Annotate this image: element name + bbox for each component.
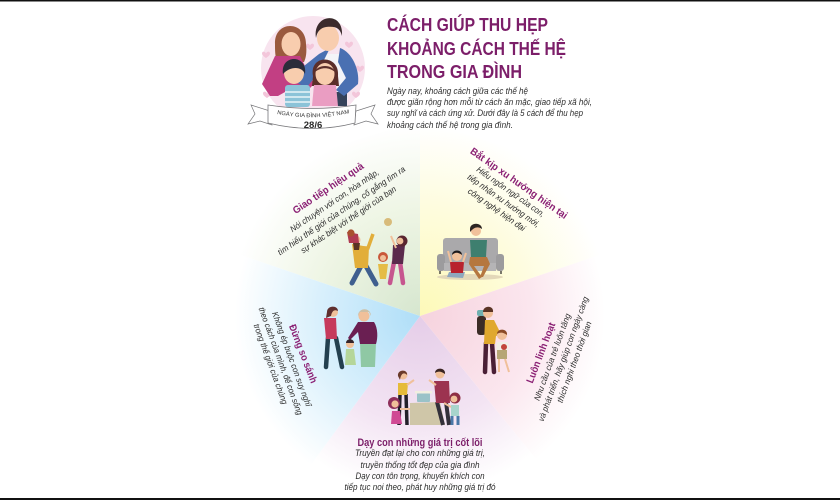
illustration: family playing ball xyxy=(347,218,408,284)
banner tails xyxy=(248,105,272,125)
text: Đừng so sánh: Đừng so sánh xyxy=(286,323,319,385)
banner label: NGÀY GIA ĐÌNH VIỆT NAM xyxy=(278,110,349,118)
boy xyxy=(285,85,310,107)
mom xyxy=(275,26,306,62)
title: TRONG GIA ĐÌNH xyxy=(387,61,522,82)
intro text: khoảng cách thế hệ trong gia đình. xyxy=(387,120,513,130)
text: Giao tiếp hiệu quả: sự khác biệt với thế giới của bạn xyxy=(299,184,398,255)
text: Giao tiếp hiệu quả: tìm hiểu thế giới của chúng, cố gắng tìm ra xyxy=(276,164,407,257)
text: Đừng so sánh: Không ép buộc con suy nghĩ xyxy=(270,310,314,410)
text: Bắt kịp xu hướng hiện tại: Bắt kịp xu hướng hiện tại xyxy=(468,145,570,222)
text: Đừng so sánh: theo cách của mình, để con sống xyxy=(257,306,305,416)
title: CÁCH GIÚP THU HẸP xyxy=(387,14,548,35)
illustration: mother, grandmother and child xyxy=(324,307,377,367)
title: KHOẢNG CÁCH THẾ HỆ xyxy=(387,38,566,59)
text: Dạy con những giá trị cốt lõi: truyền thống tốt đẹp của gia đình xyxy=(360,460,480,470)
illustration: traveller and boy xyxy=(477,307,509,372)
text: Giao tiếp hiệu quả: Nói chuyện với con, hòa nhập, xyxy=(288,167,381,234)
text: Dạy con những giá trị cốt lõi: Dạy con những giá trị cốt lõi xyxy=(358,437,482,449)
text: Dạy con những giá trị cốt lõi: Dạy con tôn trọng, khuyến khích con xyxy=(356,471,485,481)
text: Luôn linh hoạt: thích nghi theo thời gian xyxy=(555,320,594,404)
text: Luôn linh hoạt: và phát triển, hãy giúp con ngày càng xyxy=(536,295,591,423)
text: Bắt kịp xu hướng hiện tại: tiếp nhận xu hướng mới, xyxy=(466,172,542,229)
intro text: Ngày nay, khoảng cách giữa các thế hệ xyxy=(387,86,528,96)
text: Luôn linh hoạt: Luôn linh hoạt xyxy=(525,321,558,385)
text: Bắt kịp xu hướng hiện tại: công nghệ hiện đại xyxy=(466,186,528,234)
dad xyxy=(318,54,348,104)
text: Bắt kịp xu hướng hiện tại: Hiểu ngôn ngữ của con, xyxy=(475,164,547,219)
girl xyxy=(312,60,339,86)
illustration: father and child on sofa xyxy=(437,224,504,280)
text: Đừng so sánh: trong thế giới của chúng xyxy=(252,322,290,406)
title xyxy=(387,14,566,82)
intro text: suy nghĩ và cách ứng xử. Dưới đây là 5 cách để thu hẹp xyxy=(387,108,583,118)
intro text: được giãn rộng hơn mỗi từ cách ăn mặc, giao tiếp xã hội, xyxy=(387,97,592,107)
intro text xyxy=(387,86,592,130)
illustration: family cooking xyxy=(388,369,460,425)
text: Dạy con những giá trị cốt lõi: Truyền đạt lại cho con những giá trị, xyxy=(355,448,485,458)
text: Giao tiếp hiệu quả: Giao tiếp hiệu quả xyxy=(291,160,366,217)
illustration: family with banner xyxy=(247,16,379,131)
pentagon background xyxy=(120,120,720,496)
text: Dạy con những giá trị cốt lõi xyxy=(344,437,496,492)
banner date: 28/6 xyxy=(304,120,322,131)
text: Luôn linh hoạt: Nhu cầu của trẻ luôn tăng xyxy=(532,312,573,402)
text: Dạy con những giá trị cốt lõi: tiếp tục noi theo, phát huy những giá trị đó xyxy=(344,482,496,492)
